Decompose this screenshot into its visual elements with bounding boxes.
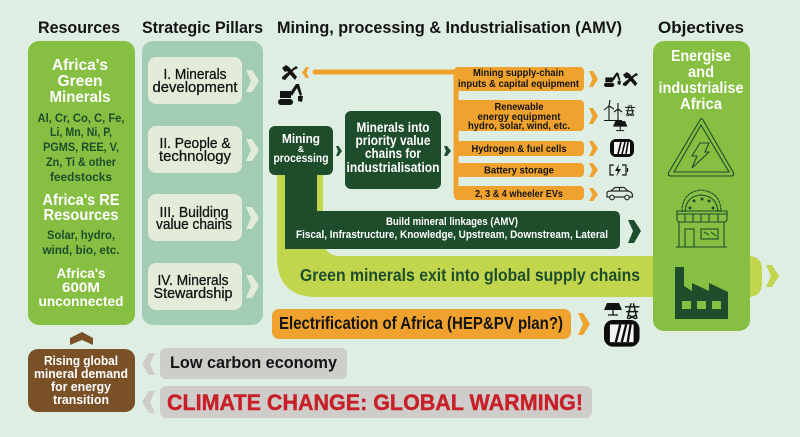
box: mining and processing: Mining — [282, 131, 320, 146]
pillar I: development — [152, 80, 238, 96]
box: low carbon economy — [160, 348, 347, 379]
box: battery storage: Battery storage — [484, 166, 554, 176]
panel: objectives: and — [688, 64, 714, 81]
connector: orange feedback line — [315, 72, 456, 193]
box: low carbon economy: Low carbon economy — [170, 354, 338, 372]
box: renewable energy equipment: Renewable — [494, 102, 544, 113]
pillar II — [148, 126, 259, 173]
pillar II: II. People & — [160, 136, 231, 152]
bar: build mineral linkages: Fiscal, Infrastructure, Knowledge, Upstream, Downstream, Lateral — [296, 229, 608, 241]
arrow: electrification chevron — [578, 313, 590, 335]
panel: resources: Africa's RE — [42, 192, 120, 209]
panel: resources: 600M — [62, 280, 100, 295]
box: hydrogen and fuel cells — [454, 141, 584, 156]
panel: resources — [28, 41, 135, 325]
icon: fuel cell — [610, 139, 634, 157]
panel: objectives: Africa — [680, 96, 722, 113]
panel: resources: Zn, Ti & other — [46, 155, 116, 169]
bar: build mineral linkages — [285, 170, 620, 249]
panel: objectives: Energise — [671, 48, 731, 65]
pillar II: technology — [159, 149, 232, 165]
arrow: minerals to value chains — [444, 146, 451, 156]
box: renewable energy equipment — [454, 100, 584, 132]
panel: resources: unconnected — [38, 294, 124, 309]
icon: excavator — [278, 84, 303, 105]
box: minerals into priority value chains — [345, 111, 441, 189]
box: renewable energy equipment: energy equipment — [478, 112, 561, 123]
column heading: Mining, processing and Industrialisation: Mining, processing & Industrialisation (AMV) — [277, 19, 622, 37]
pillar III — [148, 194, 259, 241]
icon: small tools — [623, 72, 638, 86]
band: green minerals exit into global supply chains: Green minerals exit into global supply chains — [300, 265, 640, 285]
panel: resources: feedstocks — [50, 170, 112, 184]
box: mining and processing: processing — [274, 151, 328, 165]
panel: resources: Resources — [44, 207, 118, 224]
box: rising global mineral demand: Rising global — [44, 353, 118, 368]
band: green minerals exit into global supply chains — [277, 170, 762, 297]
box: electrification of Africa — [272, 309, 571, 339]
icon: car — [607, 188, 633, 200]
pillar III: value chains — [156, 217, 232, 233]
panel: resources: PGMS, REE, V, — [43, 140, 119, 154]
box: mining and processing — [269, 126, 333, 175]
panel: resources: Al, Cr, Co, C, Fe, — [38, 111, 124, 125]
panel: resources: Li, Mn, Ni, P, — [50, 125, 112, 139]
column heading: Resources: Resources — [38, 19, 120, 37]
box: EVs: 2, 3 & 4 wheeler EVs — [475, 189, 563, 200]
icon: electrification fuel cell — [604, 320, 640, 347]
arrows: orange chevrons — [589, 71, 598, 201]
box: minerals into priority value chains: priority value — [356, 132, 431, 148]
box: minerals into priority value chains: industrialisation — [346, 159, 440, 175]
box: mining supply chain — [454, 67, 584, 91]
icon: solar panel — [613, 121, 627, 131]
panel: objectives — [653, 41, 750, 331]
icon: electrification solar — [604, 303, 622, 315]
icon: pylon — [625, 105, 635, 116]
box: renewable energy equipment: hydro, solar, wind, etc. — [468, 121, 570, 132]
box: hydrogen and fuel cells: Hydrogen & fuel cells — [472, 144, 567, 155]
panel: resources: Green — [58, 73, 102, 90]
box: mining supply chain: Mining supply-chain — [473, 68, 564, 79]
box: mining and processing: & — [298, 144, 304, 154]
box: minerals into priority value chains: chains for — [365, 145, 421, 161]
pillar IV: Stewardship — [154, 286, 232, 302]
icon: wind turbines — [604, 100, 622, 120]
icon: electrification pylon — [625, 303, 639, 319]
pillar I: I. Minerals — [164, 67, 226, 83]
pillar I — [148, 57, 259, 104]
column heading: Strategic Pillars: Strategic Pillars — [142, 19, 263, 37]
panel: resources: Solar, hydro, — [47, 228, 115, 242]
arrow: up chevron to resources — [70, 332, 93, 345]
bar: build mineral linkages: Build mineral linkages (AMV) — [386, 216, 518, 228]
icon: battery — [610, 164, 628, 177]
pillar IV — [148, 263, 259, 310]
box: mining supply chain: inputs & capital equipment — [458, 79, 580, 90]
box: rising global mineral demand: mineral demand — [34, 366, 128, 381]
box: climate change: CLIMATE CHANGE: GLOBAL WARMING! — [167, 390, 583, 415]
column heading: Objectives: Objectives — [658, 19, 744, 37]
panel: resources: Africa's — [56, 266, 106, 281]
box: rising global mineral demand: transition — [53, 392, 109, 407]
box: battery storage — [454, 163, 584, 177]
panel: objectives: industrialise — [658, 80, 744, 97]
icon: high voltage triangle — [668, 119, 734, 176]
arrow: feedback chevron — [302, 67, 309, 78]
arrow: low carbon to demand — [142, 353, 155, 375]
icon: market shop — [676, 190, 727, 247]
box: minerals into priority value chains: Minerals into — [356, 119, 430, 135]
icon: factory — [675, 267, 728, 319]
arrow: linkages chevron — [628, 220, 641, 243]
panel: resources: Minerals — [50, 89, 110, 106]
panel: resources: wind, bio, etc. — [42, 243, 120, 257]
box: electrification of Africa: Electrification of Africa (HEP&PV plan?) — [279, 313, 563, 333]
panel: strategic pillars — [142, 41, 263, 325]
box: EVs — [454, 186, 584, 200]
arrow: climate change to demand — [142, 391, 155, 413]
pillar III: III. Building — [160, 205, 228, 221]
arrow: band exit chevron — [766, 265, 779, 287]
box: rising global mineral demand — [28, 349, 135, 412]
arrow: mining to minerals — [336, 146, 342, 156]
panel: resources: Africa's — [52, 57, 108, 74]
pillar IV: IV. Minerals — [158, 273, 228, 289]
icon: tools — [282, 65, 298, 80]
icon: small excavator — [604, 73, 621, 87]
box: rising global mineral demand: for energy — [51, 379, 112, 394]
